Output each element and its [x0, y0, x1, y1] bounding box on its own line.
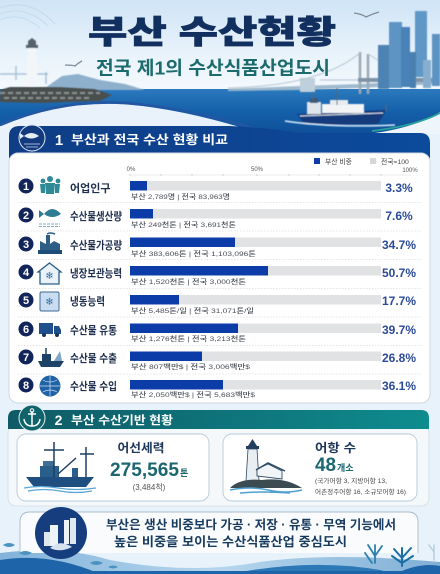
icon: freezer — [40, 292, 59, 311]
fleet count: (3,484척) — [133, 483, 166, 492]
row 6 — [18, 322, 416, 343]
row 3: 부산 383,606톤 | 전국 1,103,096톤 — [131, 249, 256, 258]
row 3: 34.7% — [382, 238, 416, 252]
row 5: 17.7% — [382, 294, 416, 308]
row 5 — [18, 292, 416, 315]
section 1 header — [9, 125, 430, 158]
icon: fish — [39, 209, 61, 226]
row 5: 5 — [23, 295, 29, 307]
row 2 — [18, 208, 413, 229]
panel: comparison — [9, 125, 430, 403]
subtitle: 전국 제1의 수산식품산업도시 — [96, 58, 330, 78]
axis: 50% — [251, 167, 264, 173]
row 4: 50.7% — [382, 266, 416, 280]
section number 2: 2 — [55, 412, 63, 428]
panel: infrastructure — [8, 405, 429, 506]
row 1: 어업인구 — [70, 182, 110, 195]
row 4: 부산 1,520천톤 | 전국 3,000천톤 — [131, 277, 246, 286]
row 8: 수산물 수입 — [70, 379, 117, 393]
row 8 — [18, 376, 416, 399]
row 5: 냉동능력 — [70, 295, 105, 308]
icon: factory — [38, 233, 62, 254]
icon: coral — [365, 545, 434, 566]
row 2: 부산 249천톤 | 전국 3,691천톤 — [131, 220, 236, 229]
row 4: 냉장보관능력 — [70, 267, 122, 280]
banner swoosh — [0, 102, 440, 134]
row 4: 4 — [23, 267, 30, 279]
icon: import globe — [40, 376, 60, 396]
legend — [314, 157, 409, 166]
icon: seagulls and radio arcs — [0, 5, 379, 66]
row 6: 부산 1,276천톤 | 전국 3,213천톤 — [131, 334, 246, 343]
row 1: 부산 2,789명 | 전국 83,963명 — [131, 192, 230, 201]
icon: people — [40, 176, 60, 194]
row 6: 수산물 유통 — [70, 323, 117, 337]
row 1: 1 — [23, 181, 29, 193]
icon: freezer: ❄ — [45, 297, 54, 308]
card: ports: 개소 — [337, 462, 354, 473]
icon: fish badge — [19, 125, 45, 151]
ports value: 48 — [315, 455, 336, 476]
card: ports — [223, 434, 417, 501]
row 8: 8 — [23, 380, 29, 392]
row 3: 3 — [23, 239, 29, 251]
row 3 — [18, 233, 416, 258]
row 8: 36.1% — [382, 379, 416, 393]
row 8: 부산 2,050백만$ | 전국 5,683백만$ — [131, 390, 255, 399]
callout: 높은 비중을 보이는 수산식품산업 중심도시 — [114, 535, 347, 549]
fleet value: 275,565 — [110, 460, 179, 481]
icon: fishing boat — [24, 442, 96, 492]
card: fleet — [17, 434, 209, 501]
section 2 background — [8, 425, 429, 506]
row 1 — [18, 176, 413, 201]
axis — [127, 167, 418, 176]
row 7 — [18, 348, 416, 371]
row 7: 부산 807백만$ | 전국 3,006백만$ — [131, 362, 250, 371]
banner scene — [0, 0, 440, 134]
legend: 부산 비중 — [325, 157, 352, 166]
banner ship — [285, 88, 395, 126]
ports title: 어항 수 — [315, 440, 356, 455]
bottom waves — [0, 550, 440, 574]
row 2: 7.6% — [385, 209, 413, 223]
row 6: 6 — [23, 324, 29, 336]
ports detail: (국가어항 3, 지방어항 13, — [315, 476, 387, 485]
icon: cold storage: ❄ — [45, 271, 54, 282]
section 2 header — [8, 405, 429, 431]
row 1: 3.3% — [385, 181, 413, 195]
icon: lighthouse — [230, 439, 302, 493]
card: fleet: 톤 — [180, 468, 188, 478]
icon: anchor badge — [19, 405, 45, 431]
legend: 전국=100 — [381, 157, 409, 166]
icon: truck — [39, 323, 61, 337]
callout — [20, 507, 418, 559]
row 4 — [18, 263, 416, 286]
icon: cold storage — [38, 263, 61, 284]
axis: 100% — [402, 168, 418, 174]
icon: export ship — [38, 348, 64, 367]
axis: 0% — [127, 167, 136, 173]
row 3: 수산물가공량 — [70, 238, 122, 252]
row 7: 수산물 수출 — [70, 351, 117, 365]
row 7: 7 — [23, 352, 29, 364]
callout text: 부산은 생산 비중보다 가공 · 저장 · 유통 · 무역 기능에서 — [106, 517, 396, 532]
row 7: 26.8% — [382, 351, 416, 365]
section number 1: 1 — [55, 132, 63, 149]
row 6: 39.7% — [382, 323, 416, 337]
icon: city and fish badge — [35, 507, 87, 559]
title: 부산 수산현황 — [88, 14, 336, 50]
row 2: 2 — [23, 210, 29, 222]
row 5: 부산 5,485톤/일 | 전국 31,071톤/일 — [131, 306, 254, 315]
icon: fish swimming — [3, 543, 118, 568]
section 1 heading: 부산과 전국 수산 현황 비교 — [71, 132, 228, 147]
card: ports: 어촌정주어항 16, 소규모어항 16) — [315, 487, 406, 496]
section 2 heading: 부산 수산기반 현황 — [71, 413, 173, 427]
row 2: 수산물생산량 — [70, 209, 122, 223]
comparison card — [9, 153, 430, 403]
fleet title: 어선세력 — [118, 441, 164, 455]
